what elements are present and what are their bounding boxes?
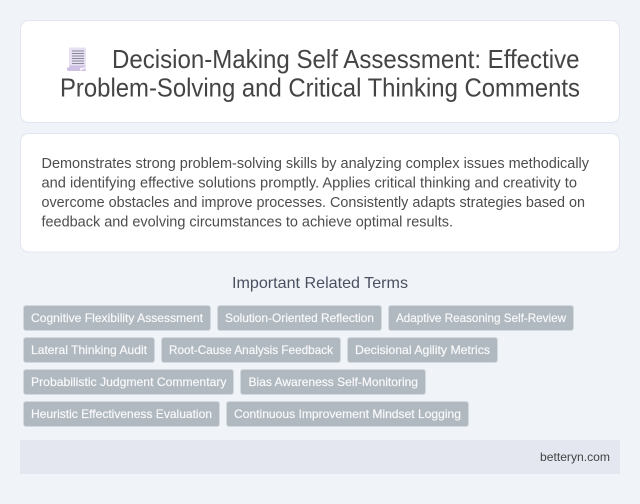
tag — [24, 306, 210, 330]
tag: Continuous Improvement Mindset Logging — [234, 407, 461, 421]
title: Decision-Making Self Assessment: Effective — [112, 46, 580, 74]
text block: description: Demonstrates strong problem-solving skills by analyzing complex issues methodically — [42, 156, 590, 172]
tag — [24, 338, 154, 362]
tag — [226, 402, 468, 426]
tag: Cognitive Flexibility Assessment — [31, 311, 204, 325]
tag: Probabilistic Judgment Commentary — [31, 375, 226, 389]
tag — [388, 306, 574, 330]
heading: important related terms: Important Related Terms — [232, 275, 408, 292]
tag — [24, 370, 234, 394]
title — [60, 46, 580, 102]
tag — [348, 338, 498, 362]
tag — [162, 338, 340, 362]
footer: betteryn.com — [540, 450, 610, 464]
text block: description: feedback and evolving circumstances to achieve optimal results. — [42, 214, 453, 230]
tag: Solution-Oriented Reflection — [225, 311, 374, 325]
icon: scroll document — [67, 48, 86, 71]
tag: Decisional Agility Metrics — [355, 343, 490, 357]
tag — [240, 370, 426, 394]
panel: title card — [20, 20, 620, 122]
title: Problem-Solving and Critical Thinking Comments — [60, 74, 580, 102]
text block: description: overcome obstacles and improve processes. Consistently adapts strategies based on — [42, 195, 585, 211]
tag: Adaptive Reasoning Self-Review — [396, 311, 566, 325]
footer — [20, 440, 620, 474]
tag — [218, 306, 382, 330]
text block: description — [42, 156, 590, 230]
tags list — [24, 306, 574, 426]
tag: Bias Awareness Self-Monitoring — [248, 375, 418, 389]
tag: Lateral Thinking Audit — [31, 343, 148, 357]
tag — [24, 402, 220, 426]
tag: Heuristic Effectiveness Evaluation — [31, 407, 212, 421]
panel: description — [20, 134, 620, 252]
text block: description: and identifying effective solutions promptly. Applies critical thinking and creativity to — [42, 176, 577, 192]
tag: Root-Cause Analysis Feedback — [169, 343, 334, 357]
